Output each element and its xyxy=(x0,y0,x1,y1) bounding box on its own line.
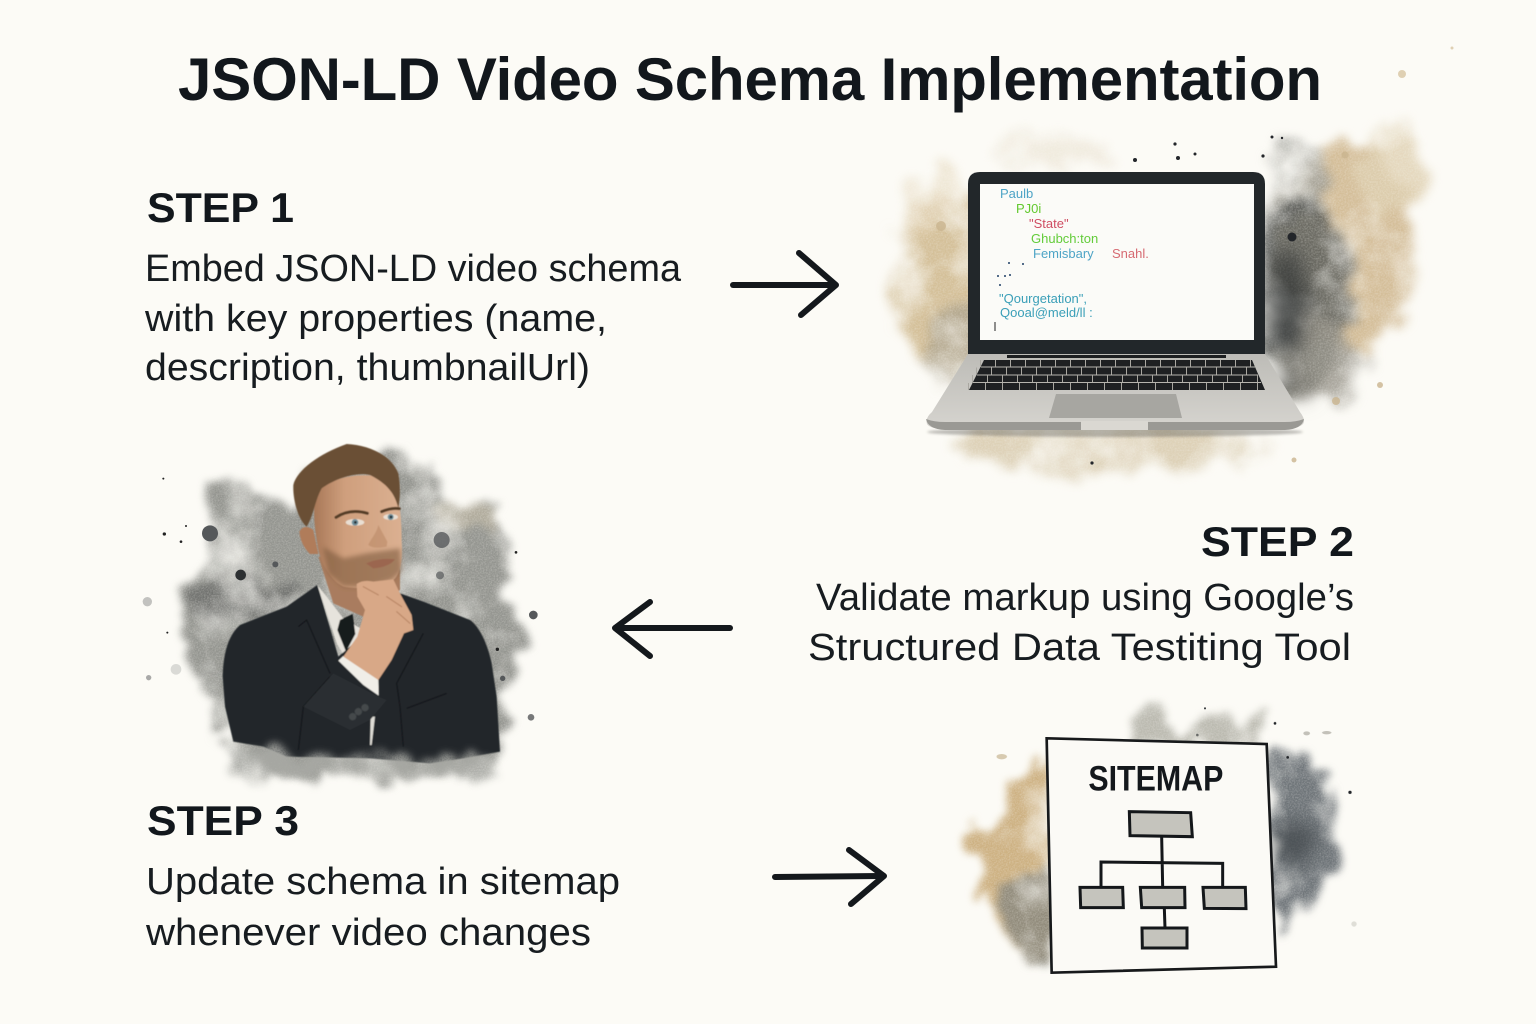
child node centre xyxy=(1140,887,1185,908)
code on screen: Qooal@meld/ll : xyxy=(1000,305,1093,320)
step 2 description: Structured Data Testiting Tool xyxy=(808,627,1351,669)
eyebrows xyxy=(336,508,399,517)
code on screen xyxy=(995,186,1149,331)
step 3 description: whenever video changes xyxy=(145,912,591,954)
arrow: step 2 to man xyxy=(615,602,730,656)
step 1 text block xyxy=(144,184,682,389)
bottom node xyxy=(1142,928,1187,948)
step 3 description xyxy=(145,861,620,954)
ink splatter dots xyxy=(1196,707,1352,794)
stubble xyxy=(323,547,402,587)
dark ink pool on wash xyxy=(1272,820,1315,867)
sleeve buttons xyxy=(349,704,369,720)
watercolor wash behind sitemap xyxy=(970,708,1342,970)
child node left xyxy=(1080,887,1123,908)
mouth xyxy=(366,559,395,568)
hand on chin xyxy=(343,579,413,680)
top node xyxy=(1129,812,1192,837)
watercolor wash behind laptop xyxy=(892,120,1420,472)
ear xyxy=(299,527,318,554)
arrow: step 1 to laptop xyxy=(733,253,836,315)
code on screen: Ghubch:ton xyxy=(1031,231,1098,246)
child node right xyxy=(1203,887,1246,909)
title: JSON-LD Video Schema Implementation xyxy=(178,46,1322,113)
step 1 description: description, thumbnailUrl) xyxy=(145,347,590,389)
step 1 description: with key properties (name, xyxy=(144,298,607,340)
code on screen: PJ0i xyxy=(1016,201,1041,216)
step 3 heading: STEP 3 xyxy=(147,797,299,844)
shirt cuff xyxy=(338,656,379,696)
shirt collar xyxy=(317,585,363,660)
suit jacket xyxy=(223,585,500,763)
illustration: sitemap diagram on watercolor wash xyxy=(970,707,1357,973)
sitemap paper xyxy=(1047,738,1276,973)
step 3 text block xyxy=(145,797,620,954)
decorative corner specks xyxy=(1398,46,1454,78)
illustration: laptop with code on watercolor wash xyxy=(892,120,1420,472)
connector lines xyxy=(1101,837,1223,928)
nose xyxy=(368,525,387,548)
laptop shadow xyxy=(927,427,1303,437)
keyboard xyxy=(968,360,1266,390)
face xyxy=(314,475,402,588)
man xyxy=(223,444,500,763)
hair xyxy=(293,444,400,527)
ink splatter dots xyxy=(1090,136,1296,465)
code on screen: Paulb xyxy=(1000,186,1033,201)
code on screen: Snahl. xyxy=(1112,246,1149,261)
trackpad xyxy=(1049,394,1182,418)
sitemap heading: SITEMAP xyxy=(1088,760,1223,799)
shirt front strip xyxy=(370,717,375,745)
laptop base xyxy=(927,354,1304,429)
code on screen: Femisbary xyxy=(1033,246,1094,261)
necktie xyxy=(337,614,355,652)
step 2 description: Validate markup using Google’s xyxy=(816,577,1354,619)
org chart xyxy=(1080,812,1246,948)
lapels xyxy=(298,620,447,750)
fading lower edge of suit xyxy=(180,663,547,830)
step 2 description xyxy=(808,577,1354,669)
eyes xyxy=(346,514,398,526)
step 3 description: Update schema in sitemap xyxy=(146,861,620,903)
step 2 text block xyxy=(808,518,1354,669)
laptop screen xyxy=(980,184,1254,340)
step 1 description xyxy=(144,248,682,389)
step 1 heading: STEP 1 xyxy=(147,184,294,231)
neck xyxy=(318,557,400,617)
step 2 heading: STEP 2 xyxy=(1201,518,1354,565)
code on screen: "Qourgetation", xyxy=(999,291,1087,306)
ink blots around man xyxy=(143,478,538,721)
code on screen: "State" xyxy=(1029,216,1069,231)
dark ink pooling on wash xyxy=(1268,245,1312,401)
sleeve xyxy=(303,673,387,730)
illustration: thoughtful man in suit on ink wash xyxy=(143,444,547,830)
laptop lid xyxy=(968,172,1265,354)
arrow: step 3 to sitemap xyxy=(775,850,884,904)
step 1 description: Embed JSON-LD video schema xyxy=(145,248,682,290)
laptop xyxy=(926,172,1304,437)
grey watercolor wash behind man xyxy=(180,460,527,778)
